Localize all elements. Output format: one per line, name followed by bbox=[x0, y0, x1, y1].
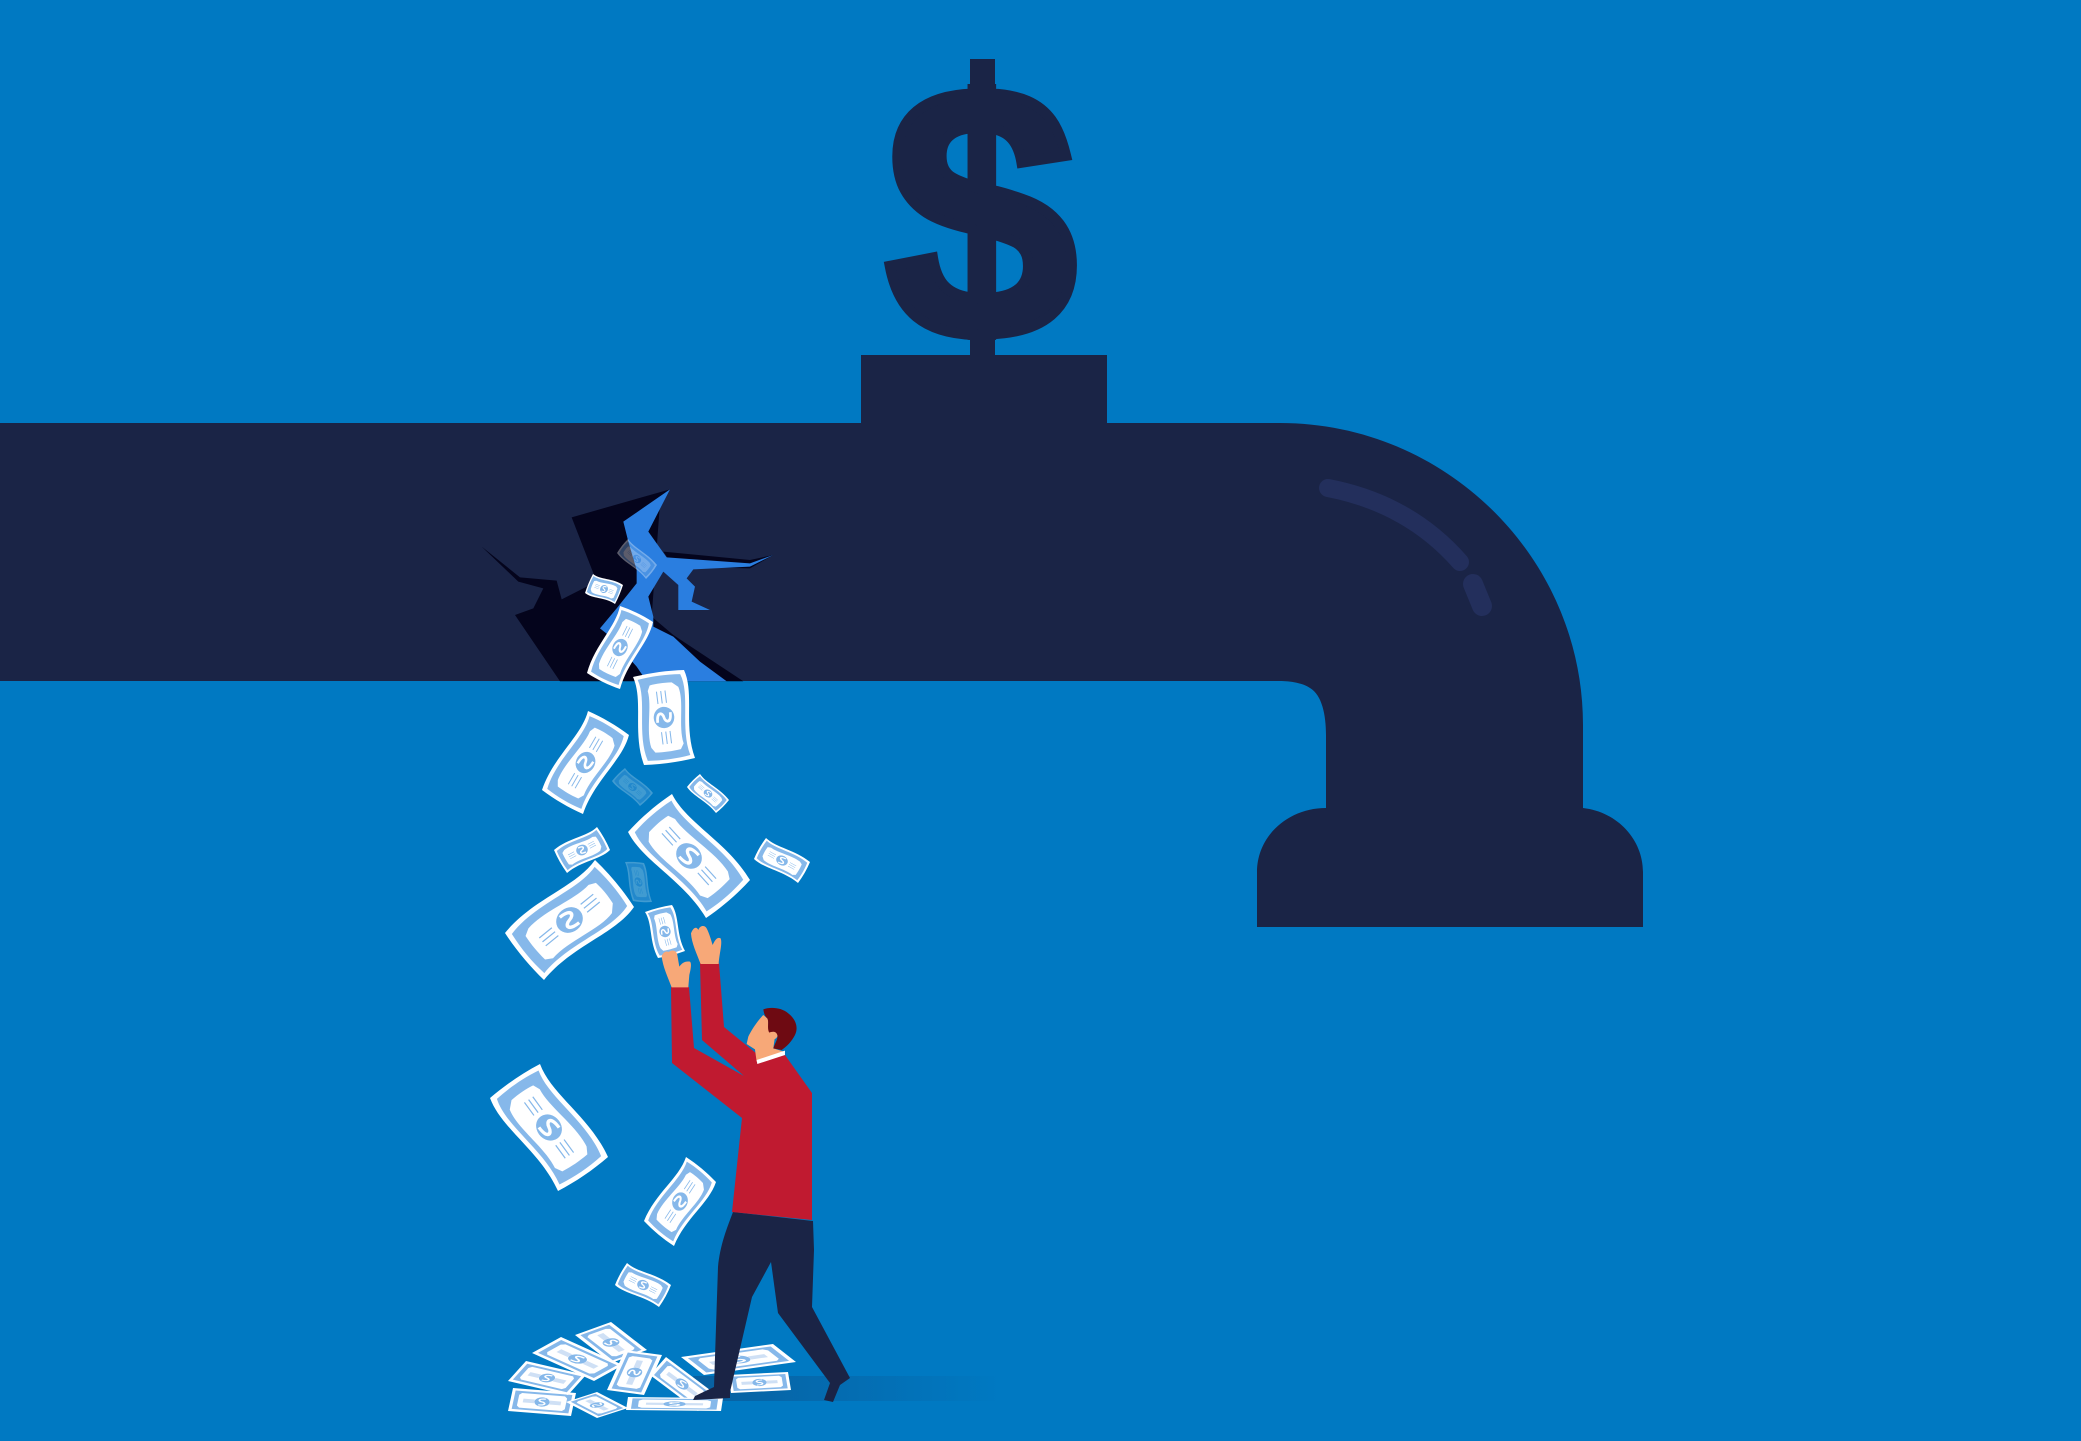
crack opening bbox=[600, 489, 773, 681]
right hand bbox=[691, 926, 721, 964]
left hand bbox=[662, 950, 691, 987]
pipe and faucet bbox=[0, 355, 1643, 927]
head and hands bbox=[662, 926, 797, 1064]
falling banknotes bbox=[487, 538, 811, 1308]
money pile on ground bbox=[508, 1322, 796, 1418]
face bbox=[747, 1015, 784, 1062]
man reaching for money bbox=[662, 926, 850, 1402]
red sweater bbox=[671, 963, 812, 1220]
ground shadow bbox=[693, 1376, 1000, 1401]
pipe highlights bbox=[1328, 488, 1482, 606]
crack shadow bbox=[482, 489, 743, 681]
white collar bbox=[757, 1051, 785, 1064]
trousers bbox=[693, 1212, 850, 1402]
hair bbox=[763, 1008, 797, 1050]
dollar sign valve handle: $ bbox=[885, 12, 1077, 415]
ear bbox=[769, 1031, 778, 1039]
crack in pipe bbox=[482, 489, 773, 681]
crack thin shadow bbox=[663, 552, 773, 568]
